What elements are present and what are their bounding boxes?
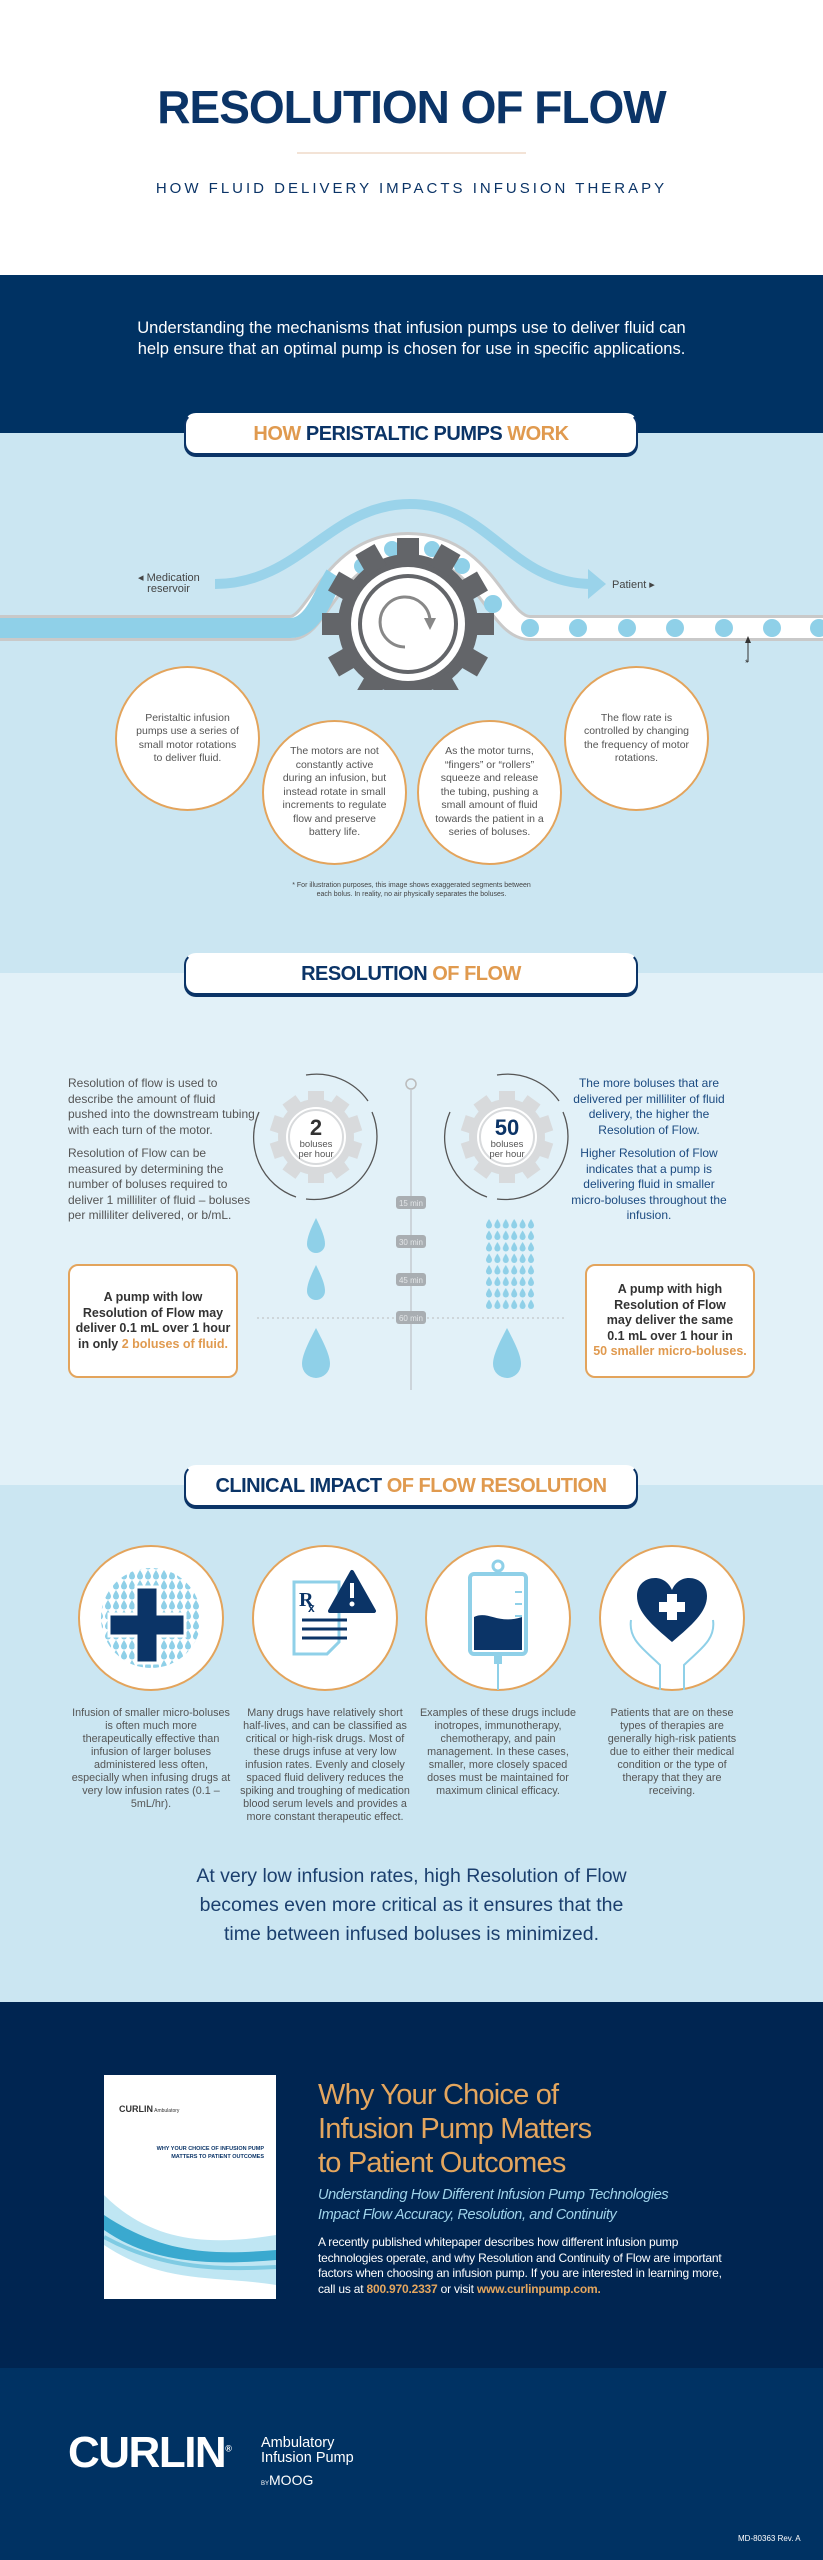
text: micro-boluses: Infusion of smaller micro-boluses is often much more therapeutically effective than infusion of larger boluses administered less often, especially when infusing drugs at very low infusion rates (0.1 – 5mL/hr). [72, 1707, 230, 1810]
chart: bolus comparison: 45 min [399, 1276, 423, 1285]
chart: bolus comparison: boluses [491, 1139, 524, 1150]
heading: resolution of flow: RESOLUTION OF FLOW [301, 963, 521, 985]
chart: bolus comparison: 15 min [399, 1199, 423, 1208]
circle: step 2 [262, 720, 407, 865]
label: medication reservoir: reservoir [147, 583, 190, 595]
icon: cross with micro-boluses [101, 1568, 199, 1668]
footnote: each bolus. In reality, no air physically separates the boluses. [317, 891, 506, 898]
icon: heart in hands [631, 1578, 713, 1690]
footer [0, 2368, 823, 2560]
icon: rx warning: x [308, 1601, 315, 1615]
heading: how peristaltic pumps work [184, 413, 638, 455]
callout: high resolution: 0.1 mL over 1 hour in [607, 1329, 733, 1343]
pump diagram [0, 499, 823, 690]
promo subheading: Understanding How Different Infusion Pump Technologies [318, 2187, 668, 2203]
chart: bolus comparison: per hour [298, 1149, 334, 1160]
closing statement: becomes even more critical as it ensures that the [200, 1894, 623, 1916]
closing statement [196, 1865, 627, 1945]
title: RESOLUTION OF FLOW [157, 81, 666, 133]
circle: step 2: The motors are not constantly active during an infusion, but instead rotate in small increments to regulate flow and preserve battery life. [283, 745, 386, 838]
circle: step 1 [115, 666, 260, 811]
promo heading: Why Your Choice of [318, 2079, 558, 2111]
logo: curlin: BYMOOG [261, 2472, 313, 2488]
circle: step 4 [564, 666, 709, 811]
callout: low resolution: in only 2 boluses of fluid. [78, 1336, 228, 1350]
promo heading [318, 2079, 592, 2179]
callout: low resolution: Resolution of Flow may [83, 1306, 223, 1320]
text: higher resolution: The more boluses that are delivered per milliliter of fluid delivery, the higher the Resolution of Flow. Higher Resolution of Flow indicates that a pump is delivering fluid in smaller micro-boluses throughout the infusion. [571, 1076, 727, 1222]
callout: high resolution: A pump with high [618, 1282, 722, 1296]
callout: high resolution [585, 1264, 755, 1378]
callout: low resolution: deliver 0.1 mL over 1 hour [76, 1321, 230, 1335]
logo: curlin: Infusion Pump [261, 2450, 354, 2466]
whitepaper cover image [104, 2075, 276, 2299]
heading: clinical impact: CLINICAL IMPACT OF FLOW RESOLUTION [215, 1475, 607, 1497]
chart: bolus comparison: 30 min [399, 1238, 423, 1247]
chart: bolus comparison: 50 [495, 1115, 519, 1140]
callout: high resolution: Resolution of Flow [614, 1298, 726, 1312]
callout: low resolution: A pump with low [104, 1290, 202, 1304]
whitepaper cover image: WHY YOUR CHOICE OF INFUSION PUMP [157, 2146, 264, 2152]
footnote [292, 882, 531, 898]
logo: curlin: CURLIN® [68, 2428, 230, 2477]
promo body: A recently published whitepaper describes how different infusion pump technologies operate, and why Resolution and Continuity of Flow are important factors when choosing an infusion pump. If you are interested in learning more, call us at 800.970.2337 or visit www.curlinpump.com. [318, 2235, 722, 2296]
logo: curlin [68, 2428, 354, 2488]
closing statement: time between infused boluses is minimized. [224, 1923, 599, 1945]
chart: bolus comparison: per hour [489, 1149, 525, 1160]
circle: step 1: Peristaltic infusion pumps use a series of small motor rotations to deliver fluid. [136, 712, 239, 764]
document code: MD-80363 Rev. A [738, 2534, 801, 2543]
heading: resolution of flow [184, 953, 638, 995]
text: drug examples: Examples of these drugs include inotropes, immunotherapy, chemotherapy, and pain management. In these cases, smaller, more closely spaced doses must be maintained for maximum clinical efficacy. [420, 1707, 576, 1797]
promo subheading [318, 2187, 668, 2223]
text: resolution definition: Resolution of flow is used to describe the amount of fluid pushed into the downstream tubing with each turn of the motor. Resolution of Flow can be measured by determining the number of boluses required to deliver 1 milliliter of fluid – boluses per milliliter delivered, or b/mL. [68, 1076, 255, 1222]
label: medication reservoir: ◂ Medication [138, 572, 200, 584]
circle: step 3 [417, 720, 562, 865]
navy intro band [0, 275, 823, 433]
intro text: Understanding the mechanisms that infusion pumps use to deliver fluid can [137, 319, 686, 337]
circle: step 3: As the motor turns, “fingers” or “rollers” squeeze and release the tubing, pushing a small amount of fluid towards the patient in a series of boluses. [435, 745, 544, 838]
footnote: * For illustration purposes, this image shows exaggerated segments between [292, 882, 531, 889]
closing statement: At very low infusion rates, high Resolution of Flow [196, 1865, 627, 1887]
label: patient: Patient ▸ [612, 579, 655, 591]
promo subheading: Impact Flow Accuracy, Resolution, and Continuity [318, 2207, 616, 2223]
whitepaper cover image: MATTERS TO PATIENT OUTCOMES [171, 2154, 264, 2160]
callout: low resolution [68, 1264, 238, 1378]
text: short half-lives: Many drugs have relatively short half-lives, and can be classified as critical or high-risk drugs. Most of these drugs infuse at very low infusion rates. Evenly and closely spaced fluid delivery reduces the spiking and troughing of medication blood serum levels and provides a more constant therapeutic effect. [240, 1707, 410, 1823]
chart: bolus comparison: 60 min [399, 1314, 423, 1323]
promo heading: to Patient Outcomes [318, 2147, 566, 2179]
section 3 background [0, 1485, 823, 2002]
clinical icons [78, 1545, 745, 1691]
icon: rx warning: R [299, 1589, 314, 1611]
intro text [137, 319, 686, 358]
pump diagram: * [745, 658, 749, 668]
intro text: help ensure that an optimal pump is chosen for use in specific applications. [138, 340, 685, 358]
circle: step 4: The flow rate is controlled by changing the frequency of motor rotations. [584, 712, 689, 764]
promo heading: Infusion Pump Matters [318, 2113, 591, 2145]
label: medication reservoir [138, 572, 200, 595]
callout: high resolution: 50 smaller micro-boluses. [593, 1344, 747, 1358]
section 2 background [0, 973, 823, 1485]
subtitle: HOW FLUID DELIVERY IMPACTS INFUSION THERAPY [156, 180, 667, 197]
whitepaper cover image: CURLIN Ambulatory [119, 2104, 179, 2114]
heading: how peristaltic pumps work: HOW PERISTALTIC PUMPS WORK [253, 423, 569, 445]
heading: clinical impact [184, 1465, 638, 1507]
chart: bolus comparison: boluses [300, 1139, 333, 1150]
icon: rx warning [294, 1572, 374, 1654]
section 1 background [0, 433, 823, 973]
icon: iv bag [470, 1561, 526, 1690]
whitepaper promo panel [0, 2002, 823, 2368]
text: high-risk patients: Patients that are on these types of therapies are generally high-risk patients due to either their medical condition or the type of therapy that they are receiving. [608, 1707, 736, 1797]
chart: bolus comparison: 2 [310, 1115, 322, 1140]
callout: high resolution: may deliver the same [607, 1313, 733, 1327]
chart: bolus comparison [252, 1074, 569, 1390]
logo: curlin: Ambulatory [261, 2435, 334, 2451]
